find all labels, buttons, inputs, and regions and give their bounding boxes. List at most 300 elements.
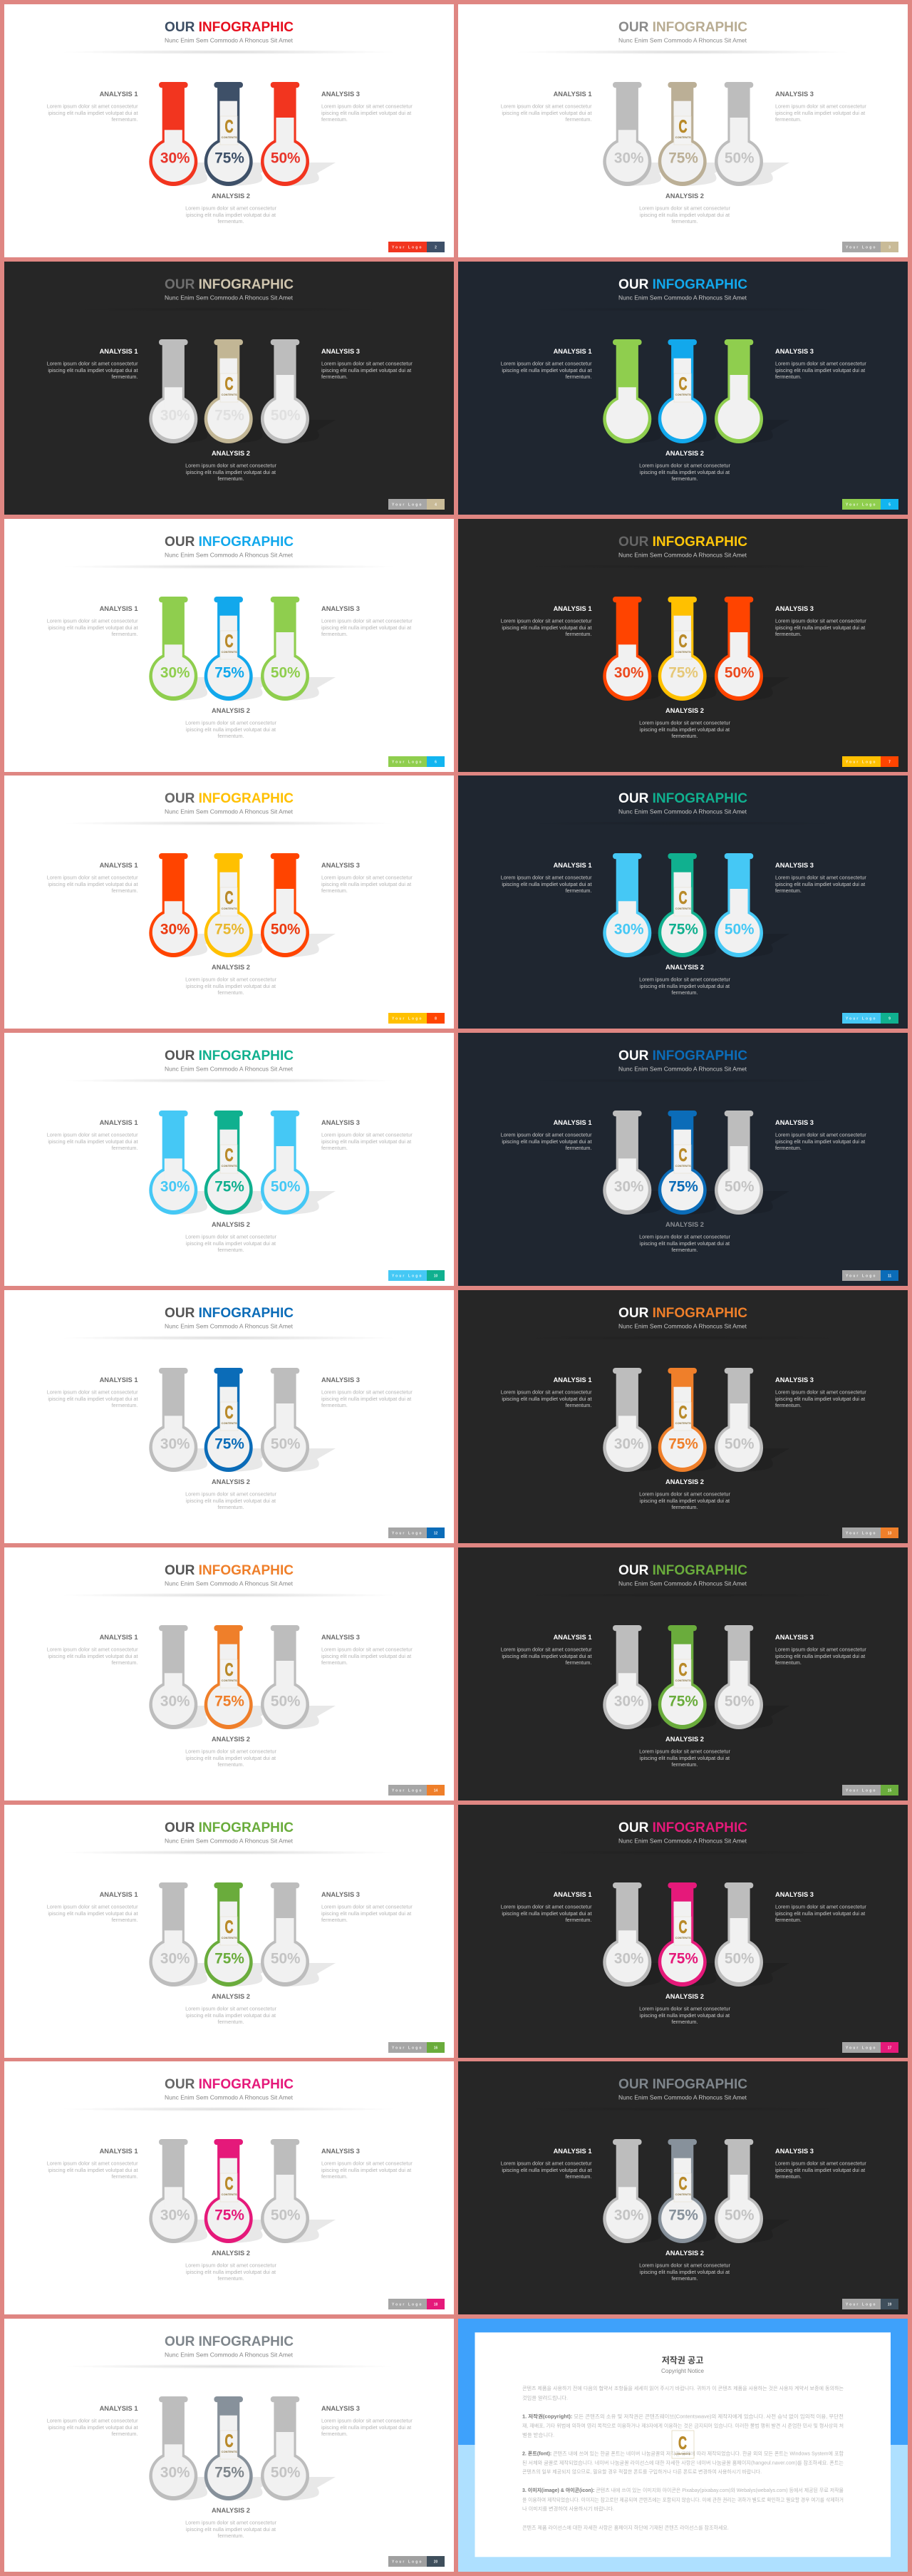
notice subheading: Copyright Notice — [661, 2367, 704, 2374]
analysis 1 text: ipiscing elit nulla impdiet volutpat dui at — [48, 2167, 138, 2173]
watermark: C — [678, 888, 687, 908]
clause 2 font — [522, 2451, 844, 2475]
analysis 3 text: Lorem ipsum dolor sit amet consectetur — [775, 1903, 866, 1910]
analysis 3 text: Lorem ipsum dolor sit amet consectetur — [775, 103, 866, 110]
footer logo badge: Your Logo — [392, 2303, 423, 2307]
analysis 1 text: ipiscing elit nulla impdiet volutpat dui at — [502, 1653, 591, 1659]
value 50%: 50% — [725, 2207, 755, 2224]
analysis 2 heading: ANALYSIS 2 — [212, 2507, 250, 2514]
value 30%: 30% — [160, 1950, 190, 1967]
flask 3 — [261, 2139, 309, 2243]
analysis 3 text: ipiscing elit nulla impdiet volutpat dui at — [775, 624, 865, 631]
clause 2 font: 된 서체와 글꼴로 제작되었습니다. 네이버 나눔글꼴 라이선스에 대한 자세한 사항은 네이버 나눔글꼴 홈페이지(hangeul.naver.com)를 참조하세요. 폰트는 — [522, 2460, 844, 2466]
value 50%: 50% — [725, 150, 755, 167]
analysis 1 text: ipiscing elit nulla impdiet volutpat dui at — [48, 367, 138, 373]
value 50%: 50% — [271, 2207, 301, 2224]
flask 2 — [204, 1368, 253, 1472]
flask 2 — [204, 2396, 253, 2500]
footer logo badge — [388, 2042, 445, 2053]
analysis 2 text: fermentum. — [218, 733, 244, 739]
analysis 2 heading: ANALYSIS 2 — [212, 707, 250, 714]
analysis 3 text: ipiscing elit nulla impdiet volutpat dui at — [775, 881, 865, 887]
value 75%: 75% — [668, 407, 698, 423]
analysis 2 text: Lorem ipsum dolor sit amet consectetur — [185, 205, 276, 211]
flask 2 — [658, 2139, 707, 2243]
footer logo badge: 3 — [888, 245, 891, 249]
analysis 3 heading: ANALYSIS 3 — [321, 605, 360, 612]
analysis 3 text: fermentum. — [321, 2431, 348, 2437]
footer logo badge: 18 — [434, 2303, 437, 2307]
analysis 3 heading: ANALYSIS 3 — [775, 1891, 814, 1898]
analysis 3 text: Lorem ipsum dolor sit amet consectetur — [321, 1903, 413, 1910]
analysis 3 text: ipiscing elit nulla impdiet volutpat dui at — [321, 1910, 411, 1917]
analysis 2 text: fermentum. — [672, 989, 698, 996]
subtitle: Nunc Enim Sem Commodo A Rhoncus Sit Amet — [165, 2094, 294, 2101]
watermark — [220, 887, 238, 916]
panel: slide 6 green and blue on white — [4, 519, 454, 772]
analysis 3 text: fermentum. — [775, 373, 802, 380]
analysis 3 text: fermentum. — [321, 1659, 348, 1666]
watermark — [220, 2173, 238, 2202]
footer logo badge — [388, 242, 445, 252]
value 30%: 30% — [160, 150, 190, 167]
clause 3 image and icon — [522, 2487, 844, 2512]
analysis 1 text: Lorem ipsum dolor sit amet consectetur — [501, 360, 592, 366]
watermark: CONTENTS — [222, 907, 237, 910]
flask 1 — [603, 82, 651, 186]
analysis 3 text: fermentum. — [775, 887, 802, 894]
footer logo badge: 9 — [888, 1017, 891, 1021]
clause 1 copyright: 재, 재배포, 기타 위법에 의하여 영리 목적으로 이용하거나 제3자에게 이용하는 것은 금지되어 있습니다. 이러한 불법 행위 발견 시 준엄한 민사 및 형사상의 처 — [522, 2423, 844, 2429]
analysis 3 text: fermentum. — [321, 2173, 348, 2180]
analysis 2 text: Lorem ipsum dolor sit amet consectetur — [185, 1491, 276, 1497]
analysis 2 heading: ANALYSIS 2 — [212, 964, 250, 971]
analysis 1 heading: ANALYSIS 1 — [100, 2405, 138, 2412]
analysis 1 text: fermentum. — [566, 373, 591, 380]
analysis 1 text: Lorem ipsum dolor sit amet consectetur — [501, 103, 592, 110]
value 50%: 50% — [271, 407, 301, 423]
analysis 2 text: fermentum. — [672, 218, 698, 225]
footer logo badge: 2 — [435, 245, 437, 249]
analysis 2 text: Lorem ipsum dolor sit amet consectetur — [639, 977, 730, 983]
flask 3 — [715, 597, 763, 701]
analysis 3 heading: ANALYSIS 3 — [775, 605, 814, 612]
title: OUR INFOGRAPHIC — [618, 790, 747, 806]
value 75%: 75% — [214, 1950, 244, 1967]
analysis 3 text: Lorem ipsum dolor sit amet consectetur — [321, 875, 413, 881]
analysis 3 heading: ANALYSIS 3 — [321, 1634, 360, 1641]
analysis 2 text: fermentum. — [672, 1761, 698, 1768]
closing note: 콘텐츠 제품 라이선스에 대한 자세한 사항은 홈페이지 하단에 기재된 콘텐츠 라이선스를 참조하세요. — [522, 2525, 729, 2531]
value 30%: 30% — [614, 922, 644, 938]
analysis 2 text: ipiscing elit nulla impdiet volutpat dui at — [186, 212, 276, 218]
panel: slide 9 light blue and teal on navy — [458, 776, 908, 1029]
footer logo badge: 16 — [434, 2046, 437, 2050]
value 75%: 75% — [668, 1436, 698, 1453]
analysis 3 heading: ANALYSIS 3 — [321, 2405, 360, 2412]
analysis 1 heading: ANALYSIS 1 — [554, 348, 591, 355]
watermark: CONTENTS — [222, 393, 237, 396]
footer logo badge: Your Logo — [392, 1017, 423, 1021]
analysis 3 heading: ANALYSIS 3 — [321, 1119, 360, 1126]
flask 1 — [149, 82, 197, 186]
analysis 2 text: ipiscing elit nulla impdiet volutpat dui at — [186, 1755, 276, 1761]
watermark: C — [225, 117, 234, 137]
analysis 1 heading: ANALYSIS 1 — [554, 1376, 591, 1384]
analysis 3 text: fermentum. — [775, 1659, 802, 1666]
analysis 3 text: fermentum. — [775, 1145, 802, 1151]
analysis 2 text: ipiscing elit nulla impdiet volutpat dui at — [640, 1755, 730, 1761]
analysis 2 heading: ANALYSIS 2 — [212, 1478, 250, 1485]
flask 1 — [603, 1111, 651, 1215]
analysis 1 text: fermentum. — [112, 373, 138, 380]
flask 2 — [658, 82, 707, 186]
analysis 2 text: ipiscing elit nulla impdiet volutpat dui at — [640, 2012, 730, 2019]
subtitle: Nunc Enim Sem Commodo A Rhoncus Sit Amet — [618, 2094, 747, 2101]
notice sheet — [475, 2332, 891, 2557]
analysis 2 text: ipiscing elit nulla impdiet volutpat dui at — [640, 726, 730, 733]
value 75%: 75% — [214, 2465, 244, 2481]
analysis 2 heading: ANALYSIS 2 — [665, 450, 704, 457]
clause 1 copyright — [522, 2413, 844, 2438]
footer logo badge — [842, 756, 898, 767]
analysis 1 heading: ANALYSIS 1 — [554, 2148, 591, 2155]
flask shadows — [173, 420, 336, 443]
footer logo badge — [388, 499, 445, 510]
value 50%: 50% — [271, 150, 301, 167]
footer logo badge: Your Logo — [846, 760, 877, 764]
value 75%: 75% — [214, 407, 244, 423]
analysis 1 text: ipiscing elit nulla impdiet volutpat dui at — [502, 881, 591, 887]
footer logo badge — [842, 1785, 898, 1796]
analysis 2 text: ipiscing elit nulla impdiet volutpat dui at — [640, 983, 730, 989]
intro paragraph: 콘텐츠 제품을 사용하기 전에 다음의 협약서 조항들을 세세히 읽어 주시기 바랍니다. 귀하가 이 콘텐츠 제품을 사용하는 것은 사용자 계약서 보증에 동의하는 — [522, 2385, 844, 2391]
watermark: C — [678, 2433, 687, 2453]
subtitle: Nunc Enim Sem Commodo A Rhoncus Sit Amet — [618, 1066, 747, 1073]
intro paragraph: 것임을 알려드립니다. — [522, 2394, 568, 2401]
analysis 3 text: Lorem ipsum dolor sit amet consectetur — [775, 1646, 866, 1652]
analysis 2 text: Lorem ipsum dolor sit amet consectetur — [185, 1234, 276, 1240]
analysis 2 text: ipiscing elit nulla impdiet volutpat dui at — [186, 2012, 276, 2019]
analysis 3 heading: ANALYSIS 3 — [321, 348, 360, 355]
analysis 2 text: ipiscing elit nulla impdiet volutpat dui at — [186, 2269, 276, 2275]
flask 3 — [261, 1625, 309, 1729]
analysis 2 text: fermentum. — [218, 475, 244, 482]
analysis 1 heading: ANALYSIS 1 — [100, 91, 138, 98]
analysis 1 text: Lorem ipsum dolor sit amet consectetur — [47, 617, 138, 624]
footer logo badge — [842, 1270, 898, 1281]
value 30%: 30% — [614, 2207, 644, 2224]
flask shadows — [627, 2220, 789, 2243]
footer logo badge: Your Logo — [392, 760, 423, 764]
analysis 2 text: ipiscing elit nulla impdiet volutpat dui at — [186, 983, 276, 989]
title: OUR INFOGRAPHIC — [618, 19, 747, 35]
flask 1 — [149, 2139, 197, 2243]
watermark — [674, 373, 692, 402]
watermark — [220, 1659, 238, 1688]
title: OUR INFOGRAPHIC — [618, 1305, 747, 1321]
title: OUR INFOGRAPHIC — [618, 2076, 747, 2092]
flask 1 — [149, 2396, 197, 2500]
footer logo badge: Your Logo — [392, 1788, 423, 1793]
analysis 2 text: ipiscing elit nulla impdiet volutpat dui at — [186, 726, 276, 733]
subtitle: Nunc Enim Sem Commodo A Rhoncus Sit Amet — [165, 1580, 294, 1587]
analysis 2 heading: ANALYSIS 2 — [665, 707, 704, 714]
subtitle: Nunc Enim Sem Commodo A Rhoncus Sit Amet — [618, 294, 747, 301]
title: OUR INFOGRAPHIC — [618, 277, 747, 292]
clause 1 copyright: 벌을 받습니다. — [522, 2432, 554, 2438]
flask 3 — [261, 1882, 309, 1987]
footer logo badge: 14 — [434, 1788, 437, 1793]
flask 1 — [603, 853, 651, 957]
footer logo badge: 7 — [888, 760, 891, 764]
value 75%: 75% — [214, 922, 244, 938]
flask 2 — [204, 82, 253, 186]
analysis 1 heading: ANALYSIS 1 — [100, 2148, 138, 2155]
analysis 1 heading: ANALYSIS 1 — [100, 1634, 138, 1641]
flask 1 — [603, 1625, 651, 1729]
analysis 2 heading: ANALYSIS 2 — [665, 2250, 704, 2257]
footer logo badge: 13 — [888, 1531, 891, 1535]
footer logo badge: Your Logo — [392, 1274, 423, 1278]
subtitle: Nunc Enim Sem Commodo A Rhoncus Sit Amet — [165, 808, 294, 815]
footer logo badge — [388, 1527, 445, 1538]
footer logo badge: Your Logo — [846, 2303, 877, 2307]
analysis 3 heading: ANALYSIS 3 — [321, 1376, 360, 1384]
panel: slide 11 grey and blue on navy — [458, 1033, 908, 1286]
analysis 1 heading: ANALYSIS 1 — [100, 348, 138, 355]
footer logo badge: Your Logo — [392, 503, 423, 507]
value 75%: 75% — [214, 1693, 244, 1709]
footer logo badge: 19 — [888, 2303, 891, 2307]
analysis 1 text: ipiscing elit nulla impdiet volutpat dui at — [502, 367, 591, 373]
clause 2 font: 콘텐츠의 일부 제공되지 않으므로, 필요할 경우 적절한 폰트를 구입하거나 다른 폰트로 변경하여 사용하시기 바랍니다. — [522, 2468, 762, 2475]
watermark: C — [225, 374, 234, 394]
analysis 3 text: ipiscing elit nulla impdiet volutpat dui at — [321, 881, 411, 887]
analysis 2 heading: ANALYSIS 2 — [665, 1221, 704, 1228]
analysis 1 text: ipiscing elit nulla impdiet volutpat dui at — [502, 1138, 591, 1145]
footer logo badge — [388, 1785, 445, 1796]
analysis 2 text: Lorem ipsum dolor sit amet consectetur — [185, 719, 276, 726]
analysis 1 text: fermentum. — [566, 2173, 591, 2180]
value 30%: 30% — [160, 922, 190, 938]
analysis 3 text: ipiscing elit nulla impdiet volutpat dui at — [321, 2167, 411, 2173]
watermark: CONTENTS — [675, 1937, 691, 1939]
analysis 2 text: Lorem ipsum dolor sit amet consectetur — [639, 205, 730, 211]
analysis 2 text: ipiscing elit nulla impdiet volutpat dui at — [640, 212, 730, 218]
flask 3 — [261, 339, 309, 443]
analysis 3 text: ipiscing elit nulla impdiet volutpat dui at — [321, 1653, 411, 1659]
flask 3 — [715, 1111, 763, 1215]
panel: slide 13 grey and orange on dark — [458, 1290, 908, 1543]
footer logo badge: Your Logo — [392, 245, 423, 249]
watermark — [674, 1917, 692, 1945]
analysis 1 text: Lorem ipsum dolor sit amet consectetur — [47, 875, 138, 881]
footer logo badge: Your Logo — [846, 1274, 877, 1278]
analysis 3 text: Lorem ipsum dolor sit amet consectetur — [775, 360, 866, 366]
analysis 1 text: Lorem ipsum dolor sit amet consectetur — [47, 1903, 138, 1910]
analysis 1 text: ipiscing elit nulla impdiet volutpat dui at — [48, 624, 138, 631]
analysis 3 text: ipiscing elit nulla impdiet volutpat dui at — [775, 110, 865, 116]
flask shadows — [173, 677, 336, 701]
value 50%: 50% — [725, 1436, 755, 1453]
flask 1 — [149, 853, 197, 957]
subtitle: Nunc Enim Sem Commodo A Rhoncus Sit Amet — [618, 37, 747, 44]
analysis 2 text: fermentum. — [218, 1761, 244, 1768]
watermark: CONTENTS — [222, 2451, 237, 2453]
value 30%: 30% — [160, 1179, 190, 1195]
analysis 2 heading: ANALYSIS 2 — [212, 450, 250, 457]
footer logo badge — [388, 756, 445, 767]
footer logo badge: 8 — [435, 1017, 437, 1021]
watermark: CONTENTS — [675, 907, 691, 910]
subtitle: Nunc Enim Sem Commodo A Rhoncus Sit Amet — [165, 551, 294, 558]
flask 2 — [658, 1625, 707, 1729]
value 75%: 75% — [214, 150, 244, 167]
value 75%: 75% — [668, 922, 698, 938]
panel: slide 2 red and navy on white — [4, 4, 454, 257]
analysis 1 text: ipiscing elit nulla impdiet volutpat dui at — [48, 1138, 138, 1145]
flask 2 — [658, 597, 707, 701]
analysis 1 text: fermentum. — [566, 887, 591, 894]
analysis 2 text: ipiscing elit nulla impdiet volutpat dui at — [186, 469, 276, 475]
flask shadows — [627, 163, 789, 186]
watermark: C — [678, 117, 687, 137]
value 50%: 50% — [271, 1950, 301, 1967]
analysis 1 text: Lorem ipsum dolor sit amet consectetur — [501, 617, 592, 624]
analysis 3 heading: ANALYSIS 3 — [775, 2148, 814, 2155]
value 75%: 75% — [668, 1693, 698, 1709]
analysis 2 heading: ANALYSIS 2 — [212, 1736, 250, 1743]
flask 3 — [261, 853, 309, 957]
title: OUR INFOGRAPHIC — [165, 1305, 294, 1321]
analysis 3 text: fermentum. — [321, 1402, 348, 1408]
flask 2 — [204, 1882, 253, 1987]
title: OUR INFOGRAPHIC — [165, 2076, 294, 2092]
flask shadows — [173, 1191, 336, 1215]
watermark: C — [678, 632, 687, 651]
analysis 1 text: Lorem ipsum dolor sit amet consectetur — [47, 1389, 138, 1396]
watermark: C — [678, 374, 687, 394]
watermark: C — [225, 2174, 234, 2194]
subtitle: Nunc Enim Sem Commodo A Rhoncus Sit Amet — [618, 1837, 747, 1844]
title: OUR INFOGRAPHIC — [165, 1048, 294, 1063]
watermark: CONTENTS — [675, 2453, 691, 2456]
subtitle: Nunc Enim Sem Commodo A Rhoncus Sit Amet — [165, 1066, 294, 1073]
analysis 2 text: ipiscing elit nulla impdiet volutpat dui at — [640, 1240, 730, 1247]
value 75%: 75% — [668, 2207, 698, 2224]
panel: slide 8 orange and yellow on white — [4, 776, 454, 1029]
panel: slide 15 grey and green on dark — [458, 1547, 908, 1800]
subtitle: Nunc Enim Sem Commodo A Rhoncus Sit Amet — [165, 37, 294, 44]
watermark: C — [225, 632, 234, 651]
footer logo badge — [388, 2299, 445, 2309]
value 50%: 50% — [271, 1179, 301, 1195]
analysis 1 text: fermentum. — [112, 887, 138, 894]
analysis 2 heading: ANALYSIS 2 — [212, 2250, 250, 2257]
flask 3 — [715, 2139, 763, 2243]
watermark: C — [225, 2431, 234, 2451]
analysis 2 text: Lorem ipsum dolor sit amet consectetur — [185, 2520, 276, 2526]
analysis 3 text: ipiscing elit nulla impdiet volutpat dui at — [321, 624, 411, 631]
watermark — [674, 631, 692, 659]
value 75%: 75% — [214, 664, 244, 681]
footer logo badge: Your Logo — [846, 503, 877, 507]
analysis 2 heading: ANALYSIS 2 — [665, 1993, 704, 2000]
panel: slide 5 green and blue on navy — [458, 262, 908, 515]
analysis 1 text: Lorem ipsum dolor sit amet consectetur — [47, 2418, 138, 2424]
analysis 2 text: Lorem ipsum dolor sit amet consectetur — [639, 2005, 730, 2011]
flask shadows — [627, 1706, 789, 1729]
analysis 3 text: ipiscing elit nulla impdiet volutpat dui at — [775, 1138, 865, 1145]
analysis 2 text: ipiscing elit nulla impdiet volutpat dui at — [640, 469, 730, 475]
panel: slide 7 orange and yellow on dark — [458, 519, 908, 772]
footer logo badge: Your Logo — [846, 1017, 877, 1021]
watermark: CONTENTS — [675, 136, 691, 139]
watermark — [220, 631, 238, 659]
value 30%: 30% — [614, 1693, 644, 1709]
value 50%: 50% — [271, 1693, 301, 1709]
analysis 1 text: fermentum. — [566, 116, 591, 123]
analysis 2 text: ipiscing elit nulla impdiet volutpat dui at — [186, 1498, 276, 1504]
watermark — [674, 2173, 692, 2202]
flask 2 — [204, 339, 253, 443]
flask shadows — [627, 1191, 789, 1215]
watermark — [220, 373, 238, 402]
analysis 1 text: ipiscing elit nulla impdiet volutpat dui at — [502, 1396, 591, 1402]
analysis 1 heading: ANALYSIS 1 — [554, 605, 591, 612]
flask shadows — [627, 420, 789, 443]
panel: slide 3 tan and grey on white — [458, 4, 908, 257]
analysis 2 text: fermentum. — [218, 1504, 244, 1510]
analysis 1 text: ipiscing elit nulla impdiet volutpat dui at — [48, 1910, 138, 1917]
watermark: C — [225, 888, 234, 908]
flask shadows — [173, 163, 336, 186]
flask 3 — [261, 82, 309, 186]
flask shadows — [173, 934, 336, 957]
value 75%: 75% — [214, 1179, 244, 1195]
clause 1 copyright: 1. 저작권(copyright): 모든 콘텐츠의 소유 및 저작권은 콘텐츠웨이브(Contentswave)의 제작자에게 있습니다. 사전 승낙 없이 임의적 이용, 무단전 — [522, 2413, 844, 2420]
footer logo badge — [842, 1013, 898, 1024]
title: OUR INFOGRAPHIC — [165, 1820, 294, 1835]
value 50%: 50% — [725, 664, 755, 681]
analysis 1 text: Lorem ipsum dolor sit amet consectetur — [47, 1132, 138, 1138]
watermark: C — [678, 1403, 687, 1423]
analysis 1 heading: ANALYSIS 1 — [554, 862, 591, 869]
clause 2 font: 2. 폰트(font): 콘텐츠 내에 쓰여 있는 한글 폰트는 네이버 나눔글꼴의 저작권 규약에 따라 제작되었습니다. 한글 외의 모든 폰트는 Windows System에 포함 — [522, 2451, 844, 2457]
flask 3 — [715, 1368, 763, 1472]
watermark — [674, 887, 692, 916]
title: OUR INFOGRAPHIC — [618, 534, 747, 550]
footer logo badge: 5 — [888, 503, 891, 507]
value 50%: 50% — [725, 1179, 755, 1195]
flask 3 — [715, 82, 763, 186]
analysis 2 heading: ANALYSIS 2 — [212, 1221, 250, 1228]
analysis 2 text: fermentum. — [218, 2533, 244, 2539]
watermark — [674, 1402, 692, 1431]
analysis 3 text: Lorem ipsum dolor sit amet consectetur — [775, 2160, 866, 2167]
analysis 3 text: ipiscing elit nulla impdiet volutpat dui at — [321, 110, 411, 116]
watermark: CONTENTS — [222, 2193, 237, 2196]
value 30%: 30% — [160, 2207, 190, 2224]
panel: slide 20 grey and slate on white — [4, 2319, 454, 2572]
analysis 3 text: ipiscing elit nulla impdiet volutpat dui at — [775, 1910, 865, 1917]
analysis 3 text: Lorem ipsum dolor sit amet consectetur — [321, 2418, 413, 2424]
footer logo badge: 17 — [888, 2046, 891, 2050]
flask 3 — [715, 1882, 763, 1987]
footer logo badge: 15 — [888, 1788, 891, 1793]
watermark: CONTENTS — [222, 136, 237, 139]
